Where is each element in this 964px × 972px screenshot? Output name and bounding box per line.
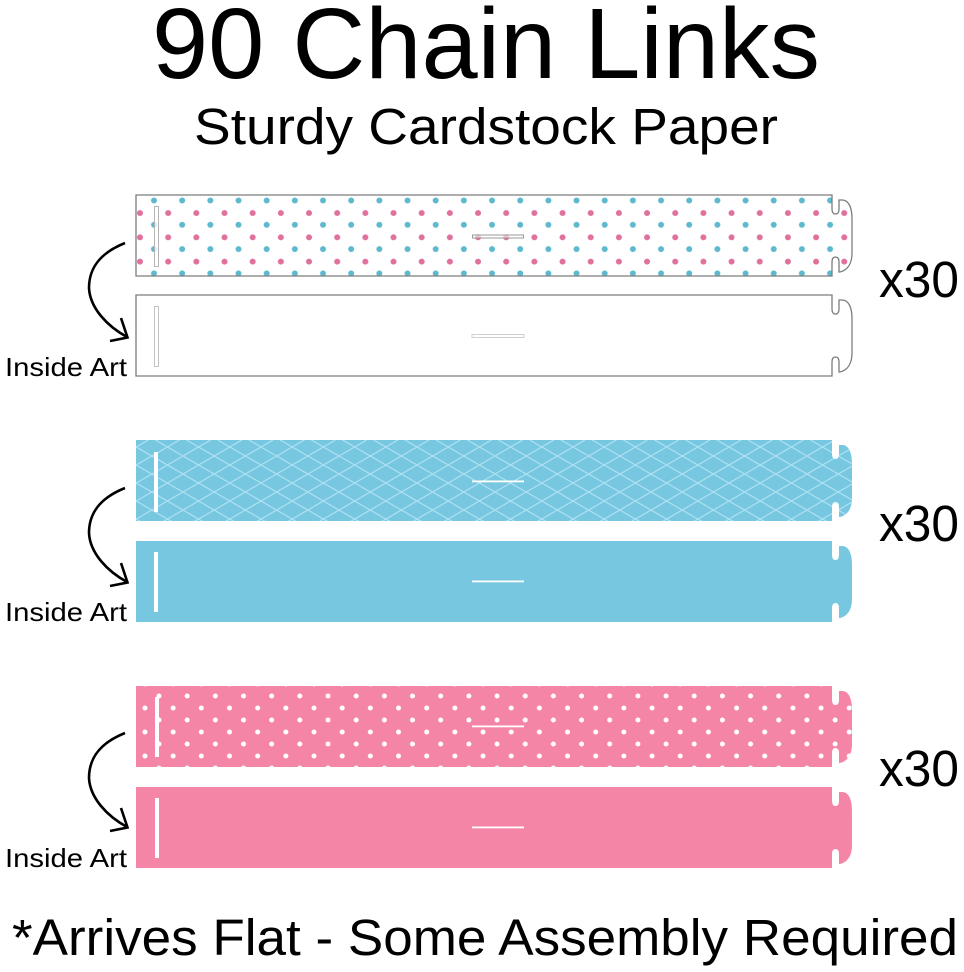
quantity: x30 (879, 495, 959, 552)
link: solid blue inside art (136, 541, 852, 622)
panel: pink links (5, 686, 959, 873)
link: plain inside art (136, 295, 852, 376)
link: blue lattice outside art (136, 440, 852, 521)
inside art label: Inside Art (5, 597, 128, 627)
quantity: x30 (879, 251, 959, 308)
panel: polka dot links (5, 195, 959, 382)
link: solid pink inside art (136, 787, 852, 868)
inside art label: Inside Art (5, 843, 128, 873)
arrow (89, 488, 128, 586)
link: polka dot outside art (136, 195, 853, 277)
link: pink dotted outside art (136, 686, 853, 768)
panel: blue links (0, 440, 964, 627)
subtitle: Sturdy Cardstock Paper (194, 98, 778, 155)
arrow (89, 733, 128, 831)
footer note: *Arrives Flat - Some Assembly Required (12, 909, 958, 966)
quantity: x30 (879, 740, 959, 797)
inside art label: Inside Art (5, 352, 128, 382)
arrow (89, 243, 128, 341)
